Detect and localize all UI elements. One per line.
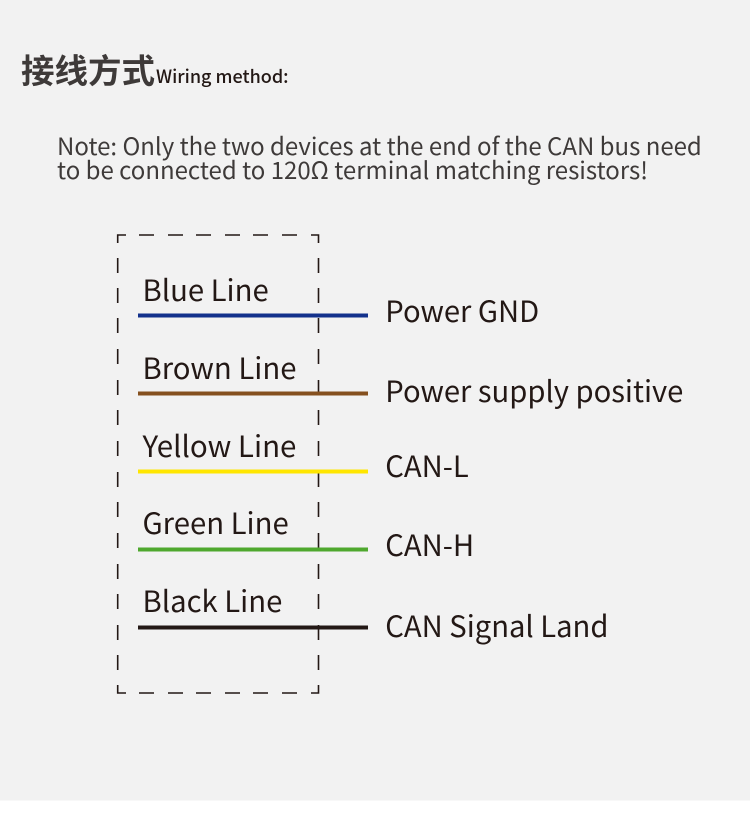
wire: green line: CAN-H — [385, 523, 474, 565]
title: Wiring method: — [156, 63, 289, 89]
wire: blue line: Power GND — [385, 289, 539, 331]
note text — [57, 127, 702, 186]
title: 接线方式 — [21, 44, 155, 93]
dashed device box — [118, 235, 318, 693]
wire: brown line — [138, 346, 683, 411]
note text: to be connected to 120Ω terminal matching resistors! — [57, 151, 648, 186]
wire: black line — [138, 579, 608, 646]
title — [21, 44, 289, 93]
wire: blue line: Blue Line — [142, 268, 269, 310]
wire: brown line: Brown Line — [142, 346, 296, 388]
wire: blue line — [138, 268, 539, 331]
wire: green line — [138, 501, 474, 565]
wire: black line: CAN Signal Land — [385, 604, 608, 646]
wire: black line: Black Line — [142, 579, 282, 621]
wire: yellow line — [138, 424, 469, 486]
note text: Note: Only the two devices at the end of the CAN bus need — [57, 127, 702, 162]
wire: green line: Green Line — [142, 501, 289, 543]
wire: brown line: Power supply positive — [385, 369, 683, 411]
wire: yellow line: Yellow Line — [142, 424, 296, 466]
wire: yellow line: CAN-L — [385, 444, 469, 486]
